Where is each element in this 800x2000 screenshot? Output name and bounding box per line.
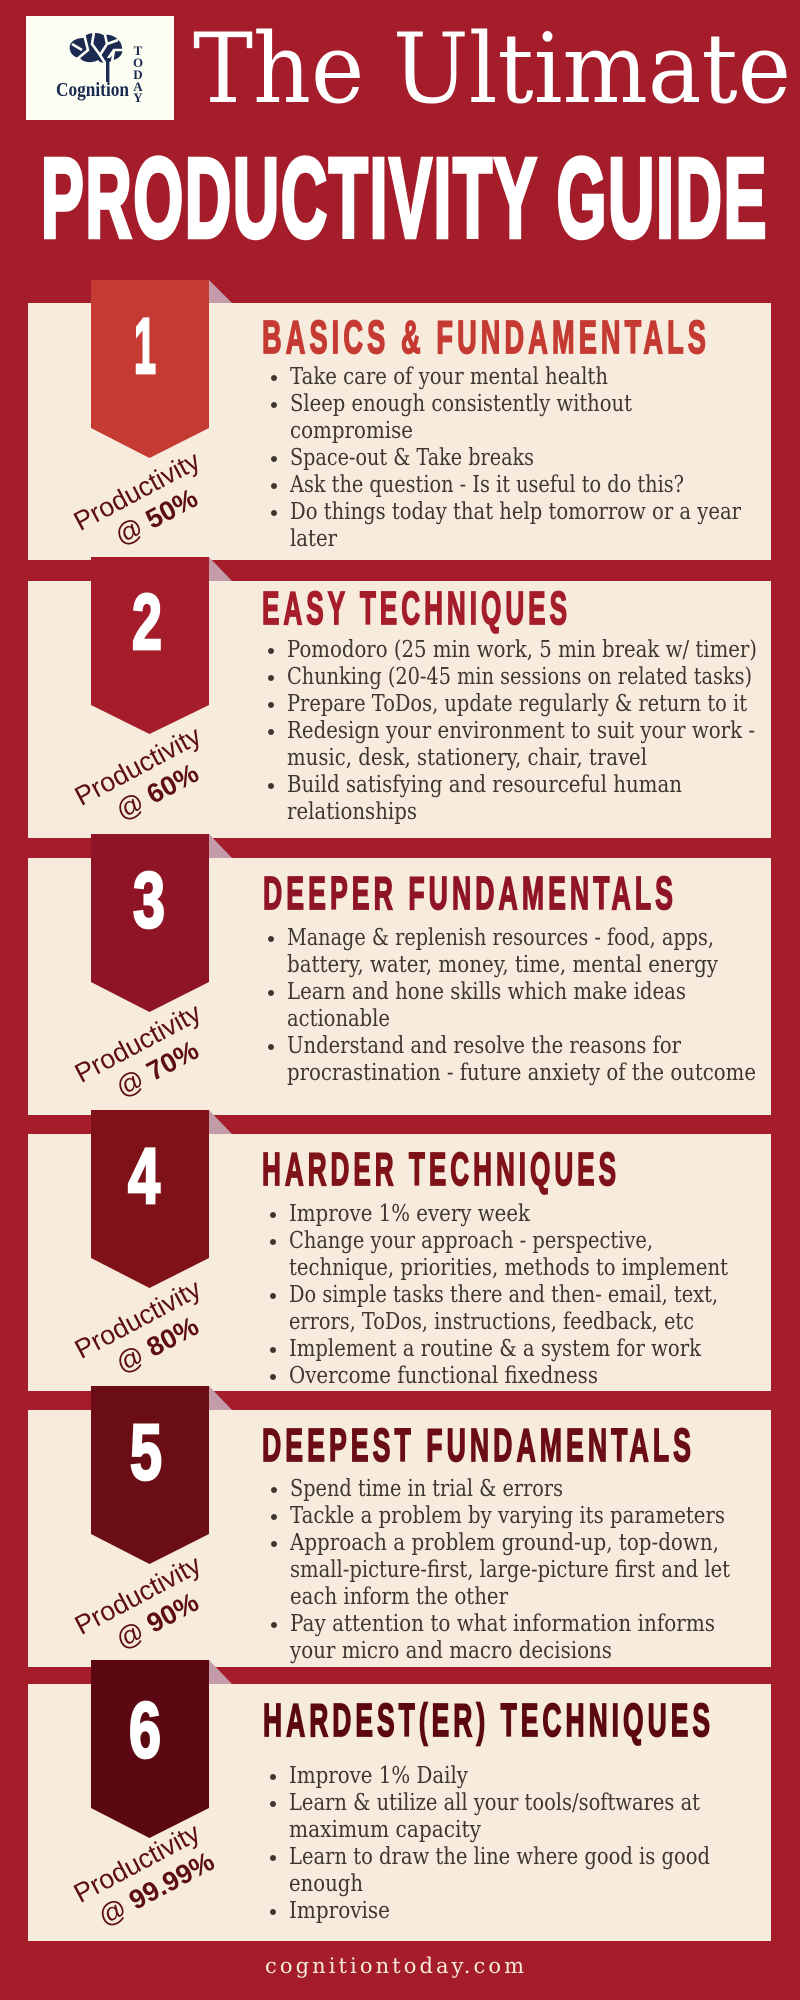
productivity label 1: @ 50% [110,483,203,551]
ribbon 6: 6 [129,1685,161,1774]
bullet list 3: actionable [287,1006,390,1032]
bullet list 2: Build satisfying and resourceful human [287,772,682,798]
bullet list 4: Overcome functional fixedness [289,1363,598,1389]
bullet list 1: Sleep enough consistently without [290,391,633,417]
panel 6: hardest(er) techniques [28,1660,771,1941]
productivity label 3 [70,997,221,1117]
logo: Cognition Today [26,16,174,120]
logo: Cognition Today: O [133,55,143,70]
bullet list 5: Pay attention to what information informs [290,1611,715,1637]
bullet list 1: Ask the question - Is it useful to do this? [289,472,684,498]
bullet list 4: technique, priorities, methods to implement [289,1255,729,1281]
logo: Cognition Today: Cognition [56,79,129,101]
productivity label 2 [70,720,221,840]
bullet list 1: Space-out & Take breaks [290,445,534,471]
bullet list 3: Understand and resolve the reasons for [287,1033,681,1059]
bullet list 5: Approach a problem ground-up, top-down, [289,1530,719,1556]
footer website: cognitiontoday.com [265,1954,524,1978]
bullet list 1: compromise [290,418,413,444]
productivity label 1 [69,445,220,565]
logo: Cognition Today: Y [133,90,143,105]
ribbon 1 [91,280,232,458]
ribbon 5: 5 [130,1407,162,1496]
bullet list 6: Improvise [289,1898,390,1924]
bullet list 4: Improve 1% every week [289,1201,531,1227]
bullet list 5: each inform the other [290,1584,508,1610]
bullet list 4: Change your approach - perspective, [289,1228,653,1254]
ribbon 3: 3 [133,855,165,944]
panel 3: deeper fundamentals [28,834,771,1117]
bullet list 4: Do simple tasks there and then- email, text, [289,1282,718,1308]
productivity label 5: @ 90% [111,1587,204,1655]
ribbon 1: 1 [134,301,156,390]
ribbon 6 [91,1660,232,1838]
panel 2: easy techniques [28,557,771,840]
bullet list 6: Improve 1% Daily [289,1763,468,1789]
productivity label 1: Productivity [69,445,205,537]
productivity label 6 [69,1817,220,1937]
productivity label 2: @ 60% [111,758,204,826]
ribbon 4: 4 [128,1131,160,1220]
ribbon 3 [91,834,232,1012]
bullet list 5: small-picture-first, large-picture first and let [290,1557,731,1583]
productivity label 2: Productivity [70,720,206,812]
bullet list 2: relationships [287,799,417,825]
bullet list 3: Manage & replenish resources - food, apps, [287,925,714,951]
bullet list 5 [271,1476,731,1664]
bullet list 1: later [290,526,337,552]
logo: Cognition Today: D [133,67,143,82]
bullet list 6: Learn & utilize all your tools/softwares at [289,1790,701,1816]
productivity label 5: Productivity [70,1549,206,1641]
bullet list 5: your micro and macro decisions [289,1638,612,1664]
bullet list 6: maximum capacity [289,1817,481,1843]
productivity label 3: Productivity [70,997,206,1089]
bullet list 5: Tackle a problem by varying its parameters [290,1503,725,1529]
panel 5: deepest fundamentals [28,1386,771,1669]
bullet list 6 [270,1763,710,1924]
heading 2: EASY TECHNIQUES [262,582,571,634]
ribbon 4 [91,1110,232,1288]
logo: Cognition Today: T [134,43,143,58]
bullet list 4 [270,1201,729,1389]
bullet list 3: Learn and hone skills which make ideas [287,979,686,1005]
ribbon 5 [91,1386,232,1564]
bullet list 5: Spend time in trial & errors [290,1476,563,1502]
bullet list 4: errors, ToDos, instructions, feedback, etc [289,1309,694,1335]
productivity label 4 [70,1273,221,1393]
panel 4: harder techniques [28,1110,771,1393]
bullet list 2 [268,637,757,825]
productivity label 3: @ 70% [111,1035,204,1103]
bullet list 2: music, desk, stationery, chair, travel [287,745,647,771]
bullet list 1 [271,364,741,552]
bullet list 3 [268,925,756,1086]
logo: Cognition Today: A [133,79,143,94]
productivity label 5 [70,1549,221,1669]
productivity label 4: @ 80% [111,1311,204,1379]
bullet list 3: battery, water, money, time, mental energy [287,952,718,978]
ribbon 2 [91,557,232,734]
ribbon 2: 2 [132,577,162,666]
panel 1: basics and fundamentals [28,280,771,565]
productivity label 4: Productivity [70,1273,206,1365]
bullet list 1: Take care of your mental health [290,364,608,390]
productivity label 6: @ 99.99% [93,1846,219,1932]
bullet list 4: Implement a routine & a system for work [289,1336,702,1362]
bullet list 6: Learn to draw the line where good is good [289,1844,710,1870]
productivity label 6: Productivity [69,1817,205,1909]
bullet list 6: enough [289,1871,363,1897]
